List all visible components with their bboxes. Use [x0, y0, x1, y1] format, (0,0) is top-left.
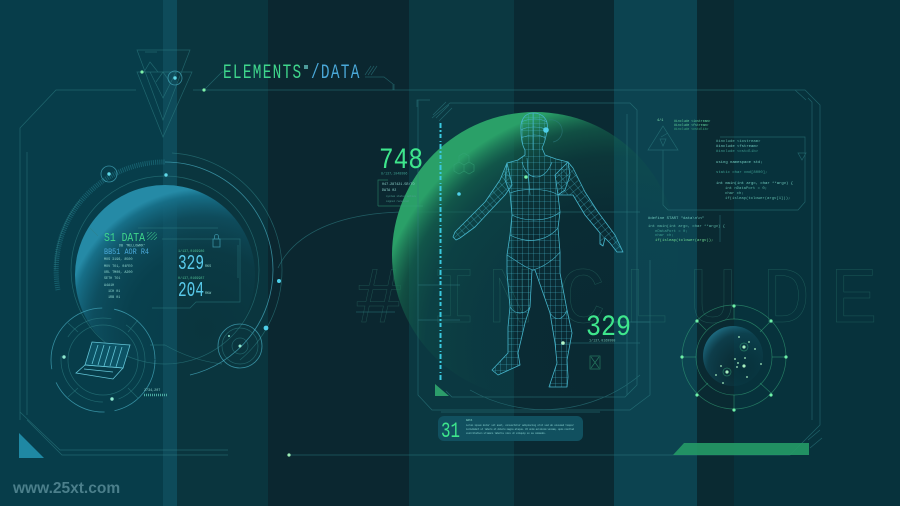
stat: 748: 047.287421.5R/TO — [382, 182, 415, 187]
stat: 329: 1/137,0169998 — [589, 338, 615, 344]
data readout: MOS 3196, 8500 — [104, 258, 132, 262]
code: main block: #include <iostream> — [716, 139, 761, 144]
code: main block: #include <cstdlib> — [716, 149, 759, 154]
knee node — [561, 341, 565, 345]
mesh: torso and legs — [492, 113, 572, 387]
icon: lock — [213, 234, 220, 247]
code: header: 4/1 — [657, 118, 663, 123]
radar globe — [680, 304, 788, 412]
mesh: left arm — [453, 163, 512, 240]
data points — [715, 336, 762, 384]
data readout: 1CH 01 — [108, 290, 120, 294]
info bar: 31 — [438, 416, 583, 444]
data readout: A4A1H — [104, 284, 114, 288]
sphere: blue — [75, 185, 255, 365]
code: main block: #include <fstream> — [716, 144, 759, 149]
node — [457, 192, 461, 196]
stat: 329: 329 — [586, 311, 631, 345]
code: secondary block: nDataPort = 0; — [655, 230, 688, 234]
icon: hourglass marker — [590, 356, 600, 369]
status label: 2734,207 — [144, 389, 160, 393]
outer frame — [20, 90, 820, 455]
left globe with rings — [51, 153, 282, 412]
sphere: radar — [703, 326, 763, 386]
triangle marker — [648, 126, 806, 210]
code: main block: int main(int argc, char **argv) { — [716, 181, 794, 186]
center panel — [392, 100, 678, 412]
title: ELEMENTS / DATA — [202, 62, 394, 92]
code: main block: if(isleap(tolower(argv[1])); — [725, 196, 790, 201]
stat: 748: system status active — [386, 195, 417, 198]
laptop ring — [51, 308, 222, 412]
code: header: #include <fstream> — [674, 123, 709, 127]
data readout: 329 — [178, 253, 204, 276]
code: secondary block: char ch; — [655, 233, 674, 238]
stat: 748: DATA 02 — [382, 189, 396, 193]
data readout — [90, 228, 240, 308]
triangle emblem — [137, 50, 192, 137]
info bar: 31: incididunt ut labore et dolore magna aliqua. Ut enim ad minim veniam, quis nostrud — [466, 427, 574, 431]
data readout: S1 DATA — [104, 231, 146, 245]
code: secondary block: #define START "data\n\n" — [648, 216, 704, 221]
icon: hexagon cluster — [454, 153, 474, 174]
code: header: #include <cstdlib> — [674, 127, 709, 131]
code: main block — [716, 139, 794, 201]
stat: 748: signal received — [386, 200, 409, 203]
stat: 748 — [378, 144, 423, 206]
info bar: 31: DATA — [466, 419, 473, 422]
icon: laptop — [76, 342, 130, 379]
green accent bar — [673, 443, 809, 455]
corner triangle: bottom left — [19, 433, 44, 458]
code: header: #include <iostream> — [674, 119, 710, 123]
code: secondary block — [648, 215, 726, 243]
head node — [543, 127, 549, 133]
ghost heading: #INCLUDE: #INCLUDE — [355, 256, 878, 347]
data readout: RKW — [205, 292, 212, 296]
info bar: 31: 31 — [441, 419, 460, 444]
outer nodes — [680, 304, 788, 412]
data readout: DB 'MELLOWRR' — [119, 244, 145, 248]
code: header — [657, 118, 710, 131]
title: ELEMENTS / DATA: ELEMENTS — [223, 62, 302, 85]
data readout: MOV TO1, 04FE0 — [104, 265, 132, 269]
data readout: 0/137,0169987 — [178, 276, 204, 281]
title: ELEMENTS / DATA: /DATA — [311, 62, 361, 85]
info bar: 31: Lorem ipsum dolor sit amet, consectetur adipiscing elit sed do eiusmod tempor — [466, 423, 574, 427]
data readout: BB51 AOR R4 — [104, 248, 149, 257]
status label — [144, 389, 168, 395]
stat: 748: 8/137,1048996 — [381, 172, 407, 176]
data readout: RKS — [205, 265, 211, 269]
contour lines — [507, 113, 567, 319]
footer node line — [287, 430, 822, 457]
corner triangle — [435, 384, 449, 396]
data readout: 1/137,0169986 — [178, 249, 204, 254]
panel frame — [417, 100, 650, 412]
connector curve — [278, 212, 640, 312]
mesh: right arm — [555, 162, 623, 252]
scale bar — [440, 123, 442, 380]
code: secondary block: int main(int argc, char **argv) { — [648, 224, 726, 229]
data readout: 204 — [178, 280, 204, 303]
data readout: SETH TO1 — [104, 277, 120, 281]
watermark: www.25xt.com — [12, 480, 120, 497]
code: main block: char ch; — [725, 191, 744, 196]
code: main block: using namespace std; — [716, 160, 763, 165]
stat: 748: 748 — [379, 144, 423, 178]
code: main block: static char cmd[8000]; — [716, 170, 767, 175]
info bar: 31: exercitation ullamco laboris nisi ut aliquip ex ea commodo. — [466, 431, 546, 435]
data readout: 1RB 01 — [108, 296, 120, 300]
rings — [55, 153, 282, 375]
sphere: green — [392, 112, 678, 398]
code: secondary block: if(isleap(tolower(argv)); — [655, 238, 713, 243]
data readout: URL TM00, A200 — [104, 271, 132, 275]
wireframe human figure — [453, 113, 623, 387]
code: main block: int nDataPort = 0; — [725, 186, 767, 191]
chest node — [524, 175, 528, 179]
code panel — [648, 118, 806, 243]
small dial — [218, 324, 262, 368]
